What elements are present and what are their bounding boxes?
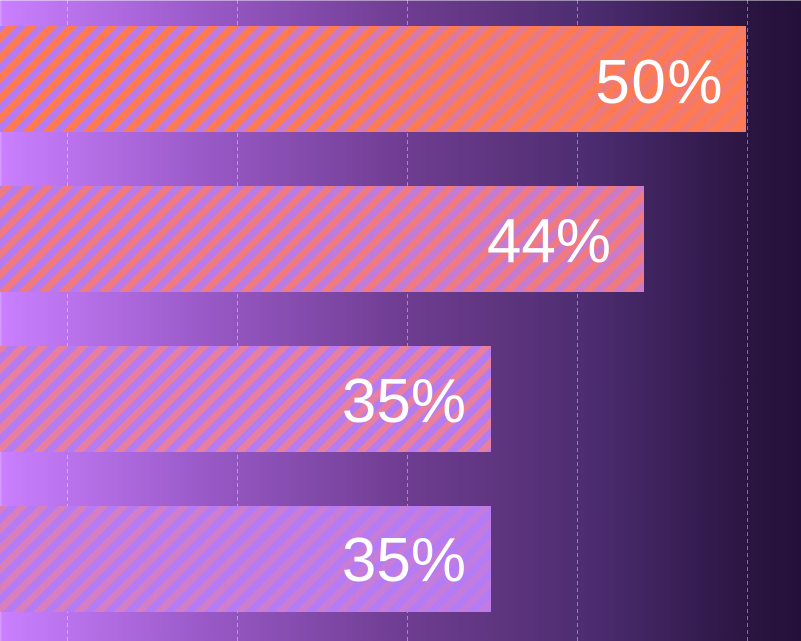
value: 50%: 50% — [595, 48, 724, 117]
bar: 35% lower — [0, 506, 491, 612]
bar: 44% — [0, 186, 644, 292]
value: 35% lower: 35% — [342, 526, 466, 595]
value: 44%: 44% — [487, 207, 611, 276]
value: 35%: 35% — [342, 367, 466, 436]
bar: 35% — [0, 346, 491, 452]
bar: 50% — [0, 26, 746, 132]
